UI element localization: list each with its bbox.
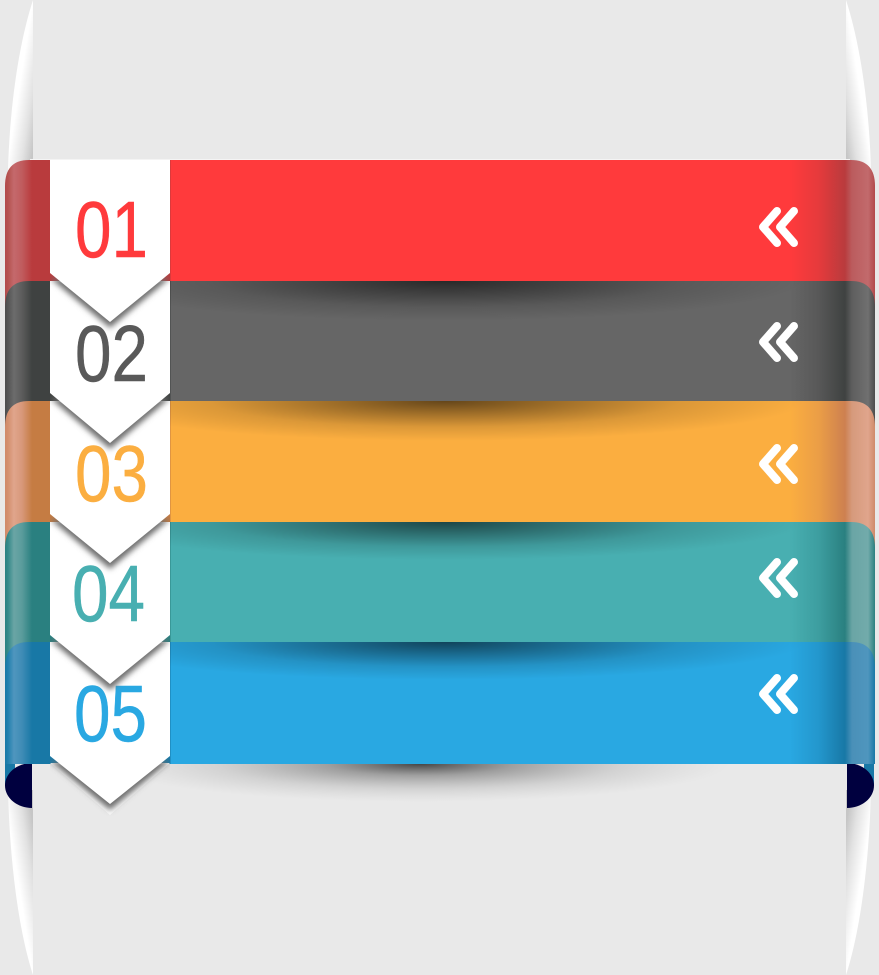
band 2: gray — [5, 281, 875, 430]
tab 2: 02 — [75, 309, 148, 398]
icon: double chevron 4 — [763, 562, 794, 594]
tab 4: 04 — [72, 549, 145, 638]
tab 2 — [50, 281, 170, 449]
navy ribbon ends — [5, 750, 874, 808]
tab 4 — [50, 522, 170, 690]
band 1: red — [5, 160, 875, 310]
tab 1: 01 — [75, 185, 148, 274]
shadow under ribbon — [110, 764, 730, 802]
tab 5 — [50, 642, 170, 815]
band 5: blue — [5, 642, 875, 764]
icon: double chevron 2 — [763, 326, 794, 358]
tab 3: 03 — [75, 429, 148, 518]
icon: double chevron 1 — [763, 211, 794, 243]
tab 1 — [50, 160, 170, 328]
tab 5: 05 — [74, 669, 147, 758]
icon: double chevron 5 — [763, 678, 794, 710]
icon: double chevron 3 — [763, 448, 794, 480]
band 3: orange — [5, 401, 875, 550]
tab 3 — [50, 401, 170, 569]
band 4: teal — [5, 522, 875, 670]
top highlight — [30, 159, 850, 160]
